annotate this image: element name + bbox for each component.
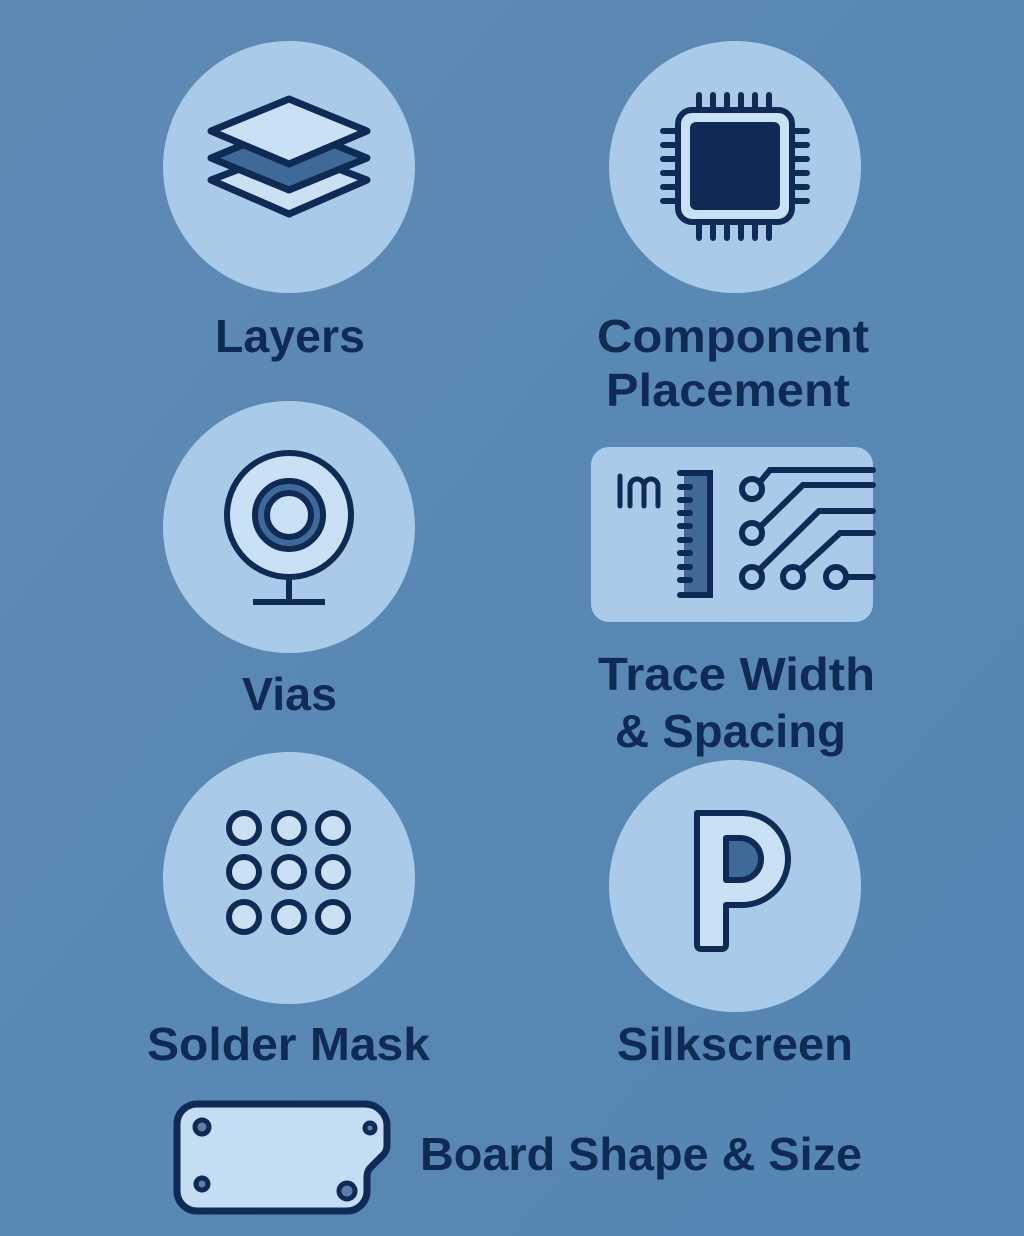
panel: trace width & spacing	[591, 447, 875, 757]
icon: layers	[163, 41, 415, 293]
icon: chip	[609, 41, 861, 293]
label: silkscreen: Silkscreen	[617, 1018, 853, 1070]
icon: traces	[591, 447, 873, 622]
icon: via	[163, 401, 415, 653]
panel: vias	[163, 401, 415, 720]
panel: board shape & size	[177, 1104, 862, 1211]
panel: layers	[163, 41, 415, 362]
icon: P letter	[609, 760, 861, 1012]
label: layers: Layers	[215, 310, 365, 362]
panel: component placement	[597, 41, 869, 416]
panel: solder mask	[147, 752, 430, 1070]
label: vias: Vias	[242, 668, 337, 720]
label: solder mask: Solder Mask	[147, 1018, 430, 1070]
label: trace width: Trace Width	[598, 648, 875, 700]
panel: silkscreen	[609, 760, 861, 1070]
panel: trace width & spacing: & Spacing	[615, 705, 846, 757]
panel: component placement: Placement	[606, 364, 850, 416]
label: component placement: Component	[597, 310, 869, 362]
label: board shape: Board Shape & Size	[420, 1128, 862, 1180]
icon: pads	[163, 752, 415, 1004]
icon: board	[177, 1104, 387, 1211]
